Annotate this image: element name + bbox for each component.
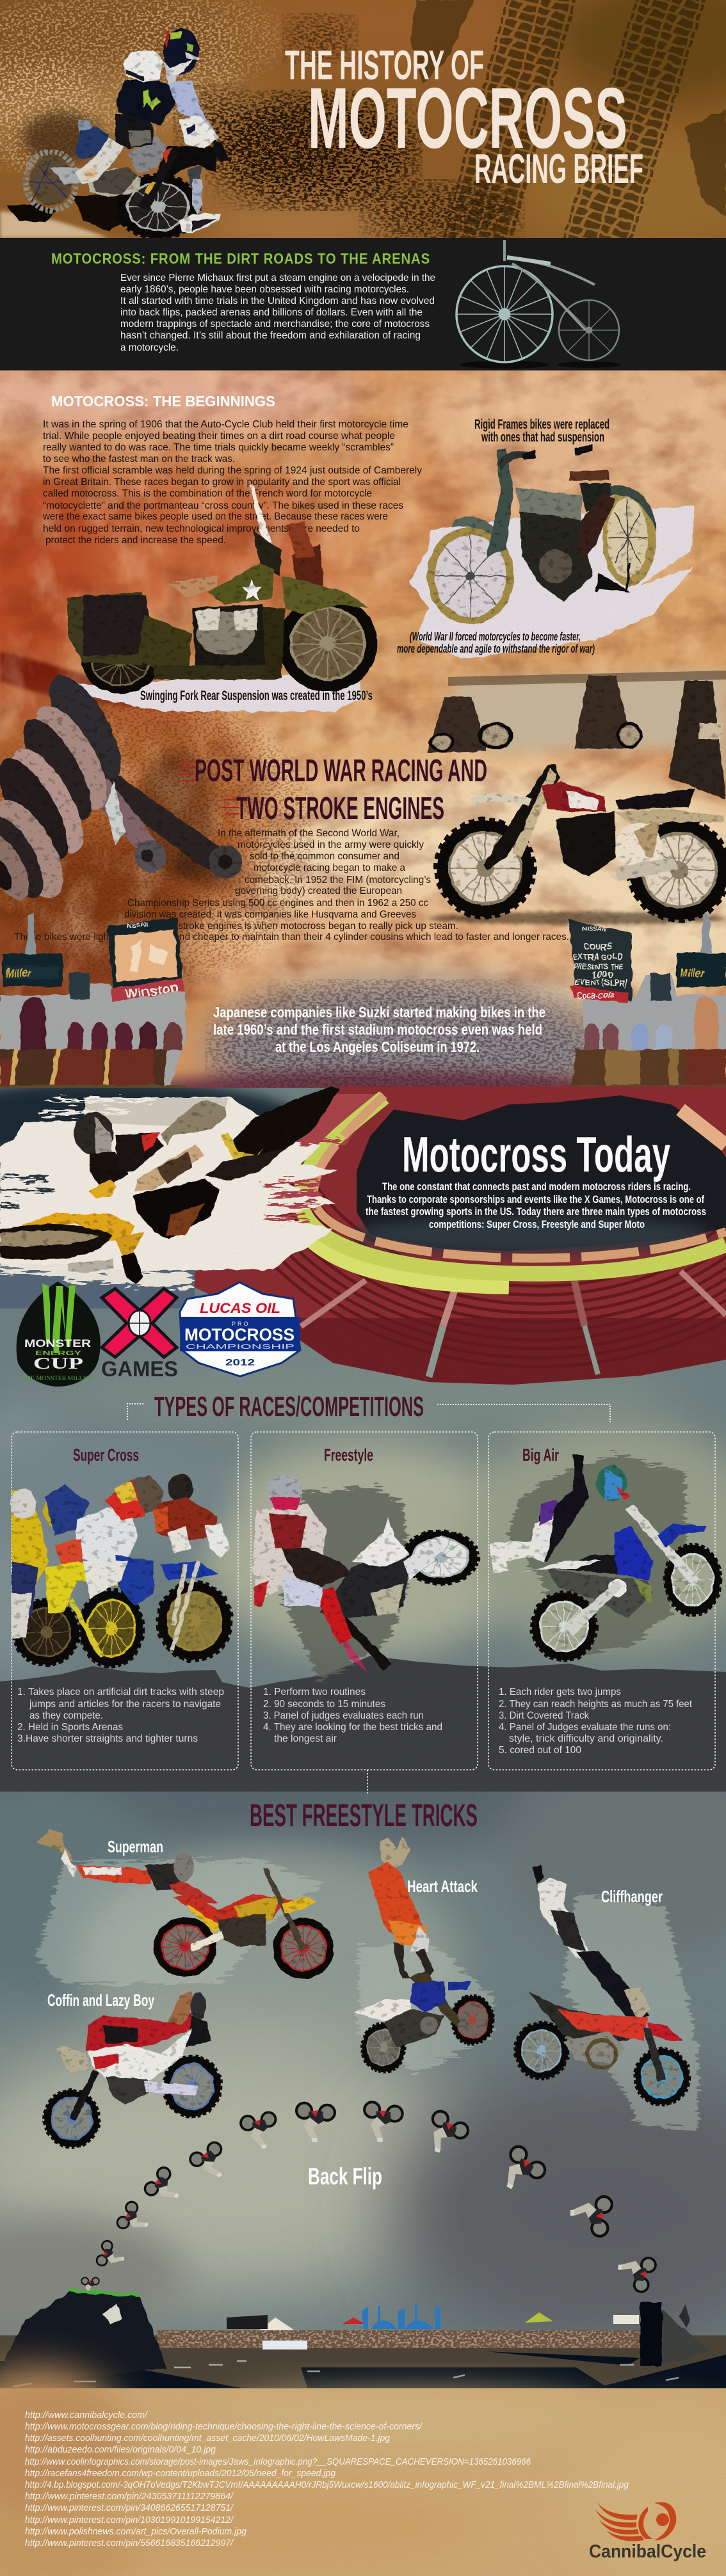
body text: called motocross. This is the combination of the French word for motorcycle xyxy=(43,488,372,499)
label: Coffin and Lazy Boy xyxy=(47,1991,154,2010)
logo: monster energy cup: ENERGY xyxy=(35,1350,82,1357)
stadium dark centre xyxy=(357,1095,726,1251)
body text: created two stroke engines is when motocross began to really pick up steam. xyxy=(125,921,458,932)
source links: http://www.pinterest.com/pin/556616835166212997/ xyxy=(25,2538,234,2548)
trick: coffin and lazy boy xyxy=(45,1991,220,2147)
intro text: a motorcycle. xyxy=(120,342,179,353)
body text: division was created. It was companies like Husqvarna and Greeves xyxy=(124,909,416,920)
logo: monster energy cup xyxy=(17,1282,101,1387)
label: Cliffhanger xyxy=(601,1887,663,1906)
japanese companies text: Japanese companies like Suzki started making bikes in the xyxy=(213,1004,545,1021)
panel: from the dirt roads to the arenas xyxy=(0,238,726,370)
coliseum left xyxy=(0,912,186,1101)
source links: http://www.pinterest.com/pin/340866265517128751/ xyxy=(25,2502,234,2513)
panel: motocross today xyxy=(0,834,726,1388)
panel: motocross today and competitions background xyxy=(0,1081,726,2393)
brush: army bike xyxy=(77,672,362,712)
dotted heading bracket xyxy=(127,1404,610,1422)
coliseum right xyxy=(570,912,726,1101)
rules xyxy=(499,1687,693,1756)
label: Heart Attack xyxy=(407,1877,478,1896)
brush: rigid bike xyxy=(410,505,695,659)
heading: TYPES OF RACES/COMPETITIONS xyxy=(154,1391,424,1422)
body text: comeback. In 1952 the FIM (motorcycling’s xyxy=(245,875,431,886)
body text: It was in the spring of 1906 that the Auto-Cycle Club held their first motorcycle time xyxy=(43,419,408,430)
crankshaft illustration xyxy=(0,665,242,919)
body text xyxy=(14,828,569,942)
white splash xyxy=(0,1097,339,1273)
paint splat xyxy=(282,1488,410,1683)
source links xyxy=(25,2410,629,2548)
freestyle rider in splash xyxy=(0,1086,339,1284)
caption: rigid frames: with ones that had suspension xyxy=(481,430,604,445)
intro text xyxy=(120,273,435,353)
description: competitions: Super Cross, Freestyle and Super Moto xyxy=(429,1219,645,1230)
rules: as they compete. xyxy=(29,1710,103,1721)
source links: http://www.polishnews.com/art_pics/Overall-Podium.jpg xyxy=(25,2526,247,2537)
panel: freestyle xyxy=(251,1432,478,1770)
japanese companies text xyxy=(213,1004,545,1055)
scoreboard right: COURS xyxy=(584,942,612,951)
source links: http://www.motocrossgear.com/blog/riding-technique/choosing-the-right-line-the-science-of-corners/ xyxy=(25,2421,423,2432)
trick: superman xyxy=(37,1829,330,1975)
paint splat xyxy=(506,1454,686,1657)
scoreboard right: PRESENTS THE xyxy=(573,962,623,971)
rules: 4. They are looking for the best tricks and xyxy=(263,1722,442,1733)
body text: “motocyclette” and the portmanteau “cross country”. The bikes used in these races xyxy=(43,500,403,511)
body text: Championship Series using 500 cc engines and then in 1962 a 250 cc xyxy=(127,898,428,909)
body text: protect the riders and increase the speed. xyxy=(45,535,226,546)
coliseum left: Miller xyxy=(6,967,31,980)
intro text: It all started with time trials in the United Kingdom and has now evolved xyxy=(120,296,435,306)
logo: lucas oil pro motocross: 2012 xyxy=(225,1357,255,1368)
intro text: early 1860’s, people have been obsessed with racing motorcycles. xyxy=(120,284,409,295)
logo: monster energy cup: CUP xyxy=(33,1355,83,1372)
crowd xyxy=(157,2312,640,2349)
japanese companies text: at the Los Angeles Coliseum in 1972. xyxy=(275,1038,480,1055)
body text: In the aftermath of the Second World War, xyxy=(218,828,399,839)
rules: 3. Dirt Covered Track xyxy=(499,1710,590,1721)
rules: 2. Held in Sports Arenas xyxy=(17,1722,123,1733)
source links: http://racefans4freedom.com/wp-content/uploads/2012/05/need_for_speed.jpg xyxy=(25,2468,336,2479)
panel: types of races and competitions xyxy=(0,1391,726,1793)
panel: best freestyle tricks xyxy=(0,1799,726,2393)
scoreboard left xyxy=(108,918,184,1001)
tire tracks xyxy=(410,0,726,273)
panel: header banner xyxy=(0,0,726,238)
rules: style, trick difficulty and originality. xyxy=(509,1733,663,1744)
intro text: into back flips, packed arenas and billions of dollars. Even with all the xyxy=(120,307,423,318)
logo: lucas oil pro motocross: MOTOCROSS xyxy=(184,1325,294,1344)
rigid frame bike xyxy=(427,445,656,624)
panel: super cross xyxy=(10,1432,238,1770)
rules: 2. 90 seconds to 15 minutes xyxy=(263,1699,385,1710)
label: Superman xyxy=(108,1837,163,1856)
source links: http://www.pinterest.com/pin/103019910199154212/ xyxy=(25,2515,234,2525)
logo: cannibalcycle xyxy=(589,2500,706,2562)
rules: 2. They can reach heights as much as 75 feet xyxy=(499,1699,693,1710)
logo: lucas oil pro motocross: CHAMPIONSHIP xyxy=(186,1344,295,1351)
arena ground xyxy=(0,2289,726,2393)
body text: were the exact same bikes people used on the street. Because these races were xyxy=(42,511,388,522)
caption: world war ii xyxy=(397,630,595,655)
motocross rider photo xyxy=(6,28,229,238)
body text: sold to the common consumer and xyxy=(250,851,399,862)
scoreboard right: EVENT (SLPR) xyxy=(575,978,627,987)
heading: TWO STROKE ENGINES xyxy=(236,791,444,826)
source links: http://assets.coolhunting.com/coolhunting/mt_asset_cache/2010/06/02/HowLawsMade-1.jpg xyxy=(25,2433,391,2444)
japanese companies text: late 1960’s and the first stadium motocross even was held xyxy=(213,1021,542,1038)
rules: 1. Each rider gets two jumps xyxy=(499,1687,621,1697)
title: Freestyle xyxy=(324,1445,373,1465)
title: Super Cross xyxy=(73,1445,139,1465)
blue tents xyxy=(362,2303,440,2329)
label: Back Flip xyxy=(308,2163,382,2190)
panel: footer sources xyxy=(0,2367,726,2576)
source links: http://www.coolinfographics.com/storage/post-images/Jaws_Infographic.png?__SQUARESPACE_CACHEVERSION=1365261036966 xyxy=(25,2456,531,2467)
intro text: modern trappings of spectacle and merchandise; the core of motocross xyxy=(120,319,430,330)
body text: held on rugged terrain, new technological improvements were needed to xyxy=(43,523,360,534)
trick: back flip sequence xyxy=(81,2101,657,2295)
rules: 3.Have shorter straights and tighter turns xyxy=(17,1733,198,1744)
caption: rigid frames: Rigid Frames bikes were replaced xyxy=(474,417,609,432)
rules: the longest air xyxy=(274,1733,337,1744)
rules xyxy=(263,1687,442,1744)
panel: post world war racing xyxy=(0,665,726,942)
caption: rigid frames xyxy=(474,417,609,445)
source links: http://www.cannibalcycle.com/ xyxy=(25,2410,149,2421)
rules: 1. Perform two routines xyxy=(263,1687,366,1697)
body text: trial. While people enjoyed beating their times on a dirt road course what people xyxy=(43,431,395,441)
logo: monster energy cup: MONSTER xyxy=(24,1337,91,1349)
body text: to see who the fastest man on the track was. xyxy=(43,454,235,465)
track marks xyxy=(13,2361,679,2387)
paint streaks xyxy=(0,1099,339,1287)
panel: beginnings and post war background xyxy=(0,346,726,1121)
title xyxy=(285,42,643,192)
coliseum right: Miller xyxy=(680,967,705,980)
rules xyxy=(17,1687,224,1744)
source links: http://abduzeedo.com/files/originals/0/04_10.jpg xyxy=(25,2444,216,2455)
body text: in Great Britain. These races began to grow in popularity and the sport was official xyxy=(43,477,401,488)
panel: coliseum xyxy=(0,912,726,1101)
description xyxy=(366,1181,706,1230)
logo: cannibalcycle: CannibalCycle xyxy=(589,2541,706,2562)
body text xyxy=(42,419,422,546)
caption: world war ii: (World War II forced motorcycles to become faster, xyxy=(410,630,581,643)
heading: MOTOCROSS: THE BEGINNINGS xyxy=(51,393,275,409)
racers xyxy=(10,1474,230,1666)
source links: http://4.bp.blogspot.com/-3qOH7oVedgs/T2KbwTJCVmI/AAAAAAAAAH0/rJRbj5Wuxcw/s1600/ablitz_infographic_WF_v21_final%2BML%2Bfinal%2Bfinal.jpg xyxy=(25,2479,629,2490)
army motorcycle xyxy=(67,484,371,690)
logo: lucas oil pro motocross: PRO xyxy=(232,1321,250,1327)
scoreboard right: Coca-Cola xyxy=(576,990,615,1000)
scoreboard right: 1000 xyxy=(592,970,613,980)
dark terrain xyxy=(0,1656,726,1792)
caption: world war ii: more dependable and agile to withstand the rigor of war) xyxy=(397,642,595,655)
icon: velocipede xyxy=(456,240,621,369)
trick: cliffhanger xyxy=(515,1865,689,2104)
source links: http://www.pinterest.com/pin/243053711112279864/ xyxy=(25,2491,234,2502)
heading: POST WORLD WAR RACING AND xyxy=(195,754,487,788)
body text: really wanted to do was race. The time trials quickly became weekly “scrambles” xyxy=(43,442,394,453)
body text: governing body) created the European xyxy=(235,886,402,896)
heading: MOTOCROSS: FROM THE DIRT ROADS TO THE ARENAS xyxy=(51,250,430,267)
sepia race photo xyxy=(428,671,726,800)
intro text: Ever since Pierre Michaux first put a steam engine on a velocipede in the xyxy=(120,273,435,283)
heading: BEST FREESTYLE TRICKS xyxy=(250,1799,478,1833)
stadium ring xyxy=(301,1095,726,1282)
two stroke motorcycle xyxy=(429,765,726,925)
dark red swoosh xyxy=(0,651,205,710)
flip frames xyxy=(81,2101,657,2295)
heading xyxy=(177,754,487,826)
takeoff ramp xyxy=(0,2289,168,2380)
rules: jumps and articles for the racers to navigate xyxy=(29,1699,221,1710)
rules: 3. Panel of judges evaluates each run xyxy=(263,1710,424,1721)
rules: 1. Takes place on artificial dirt tracks with steep xyxy=(17,1687,224,1697)
body text: motorcycles used in the army were quickly xyxy=(238,839,424,850)
title: THE HISTORY OF xyxy=(285,42,484,88)
title: Big Air xyxy=(522,1445,559,1465)
panel: motocross the beginnings xyxy=(42,393,695,712)
logo: x games: GAMES xyxy=(101,1357,178,1381)
rules: 4. Panel of Judges evaluate the runs on: xyxy=(499,1722,671,1733)
dirt background tones xyxy=(0,0,726,256)
splash shading xyxy=(85,1098,229,1126)
scoreboard right: EXTRA GOLD xyxy=(573,952,623,962)
paint strokes behind riders xyxy=(37,1859,698,2131)
caption: swinging fork: Swinging Fork Rear Suspension was created in the 1950’s xyxy=(140,688,373,703)
scoreboard right: NISSAN xyxy=(583,926,607,933)
body text: These bikes were lighter, more agile and cheaper to maintain than their 4 cylinder cousins which lead to faster and longer races. xyxy=(14,932,569,942)
logo: lucas oil pro motocross xyxy=(180,1282,300,1376)
big air rider xyxy=(490,1454,720,1660)
rules: 5. cored out of 100 xyxy=(499,1745,581,1756)
dirt splatter xyxy=(22,13,525,243)
freestyle rider xyxy=(252,1475,478,1673)
scoreboard right xyxy=(569,920,632,1003)
intro text: hasn’t changed. It’s still about the freedom and exhilaration of racing xyxy=(120,330,421,341)
trick: heart attack xyxy=(353,1836,494,2071)
panel: big air xyxy=(488,1432,720,1770)
landing ramp xyxy=(640,2302,711,2366)
logo: x games xyxy=(101,1289,178,1381)
body text: motorcycle racing began to make a xyxy=(254,863,405,873)
body text: The first official scramble was held during the spring of 1924 just outside of Camberely xyxy=(43,465,422,476)
logo: monster energy cup: THE MONSTER MILLION xyxy=(22,1375,95,1381)
scoreboard left: NISSAN xyxy=(126,921,149,929)
logo: lucas oil pro motocross: LUCAS OIL xyxy=(200,1300,280,1316)
stadium bowl xyxy=(192,834,726,1388)
scoreboard left: Winston xyxy=(124,981,179,1001)
